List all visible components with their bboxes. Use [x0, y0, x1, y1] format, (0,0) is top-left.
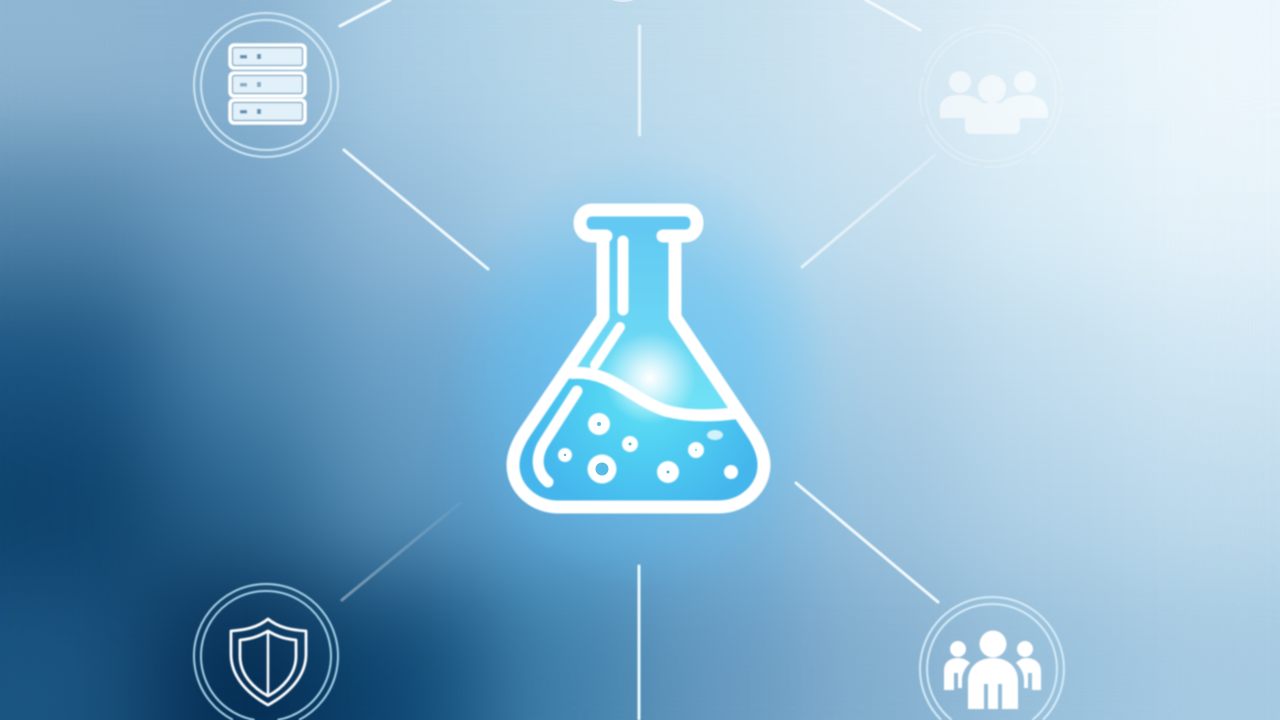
people figures [944, 630, 1041, 709]
line: top centre [638, 26, 641, 135]
line: to shield icon [342, 503, 460, 600]
flask upper gas [570, 210, 737, 416]
icon: faded people group [920, 25, 1062, 167]
top centre node remnant [612, 0, 634, 2]
icon: server stack [194, 13, 338, 157]
bubble centres [564, 422, 697, 476]
spark of light [604, 332, 696, 424]
line: to people icon [796, 483, 938, 602]
line: top left [340, 0, 390, 26]
rings [194, 584, 338, 720]
flask outline [513, 210, 764, 507]
rings [920, 597, 1064, 720]
central glow [450, 150, 830, 590]
icon: flask [513, 210, 764, 507]
line: top right [866, 0, 920, 30]
icon: people group [920, 597, 1064, 720]
rings [920, 25, 1062, 167]
row inner borders [232, 48, 302, 120]
line: to faded people icon [802, 155, 935, 267]
people [940, 71, 1048, 134]
row marks [240, 54, 261, 114]
line: bottom centre [638, 566, 640, 719]
server rows [230, 45, 305, 123]
shield outline [231, 619, 306, 705]
line: to server icon [344, 150, 488, 269]
rings [194, 13, 338, 157]
bubbles [558, 413, 738, 484]
connector lines [340, 0, 938, 719]
icon: shield [194, 584, 338, 720]
flask glass fill [513, 210, 764, 507]
